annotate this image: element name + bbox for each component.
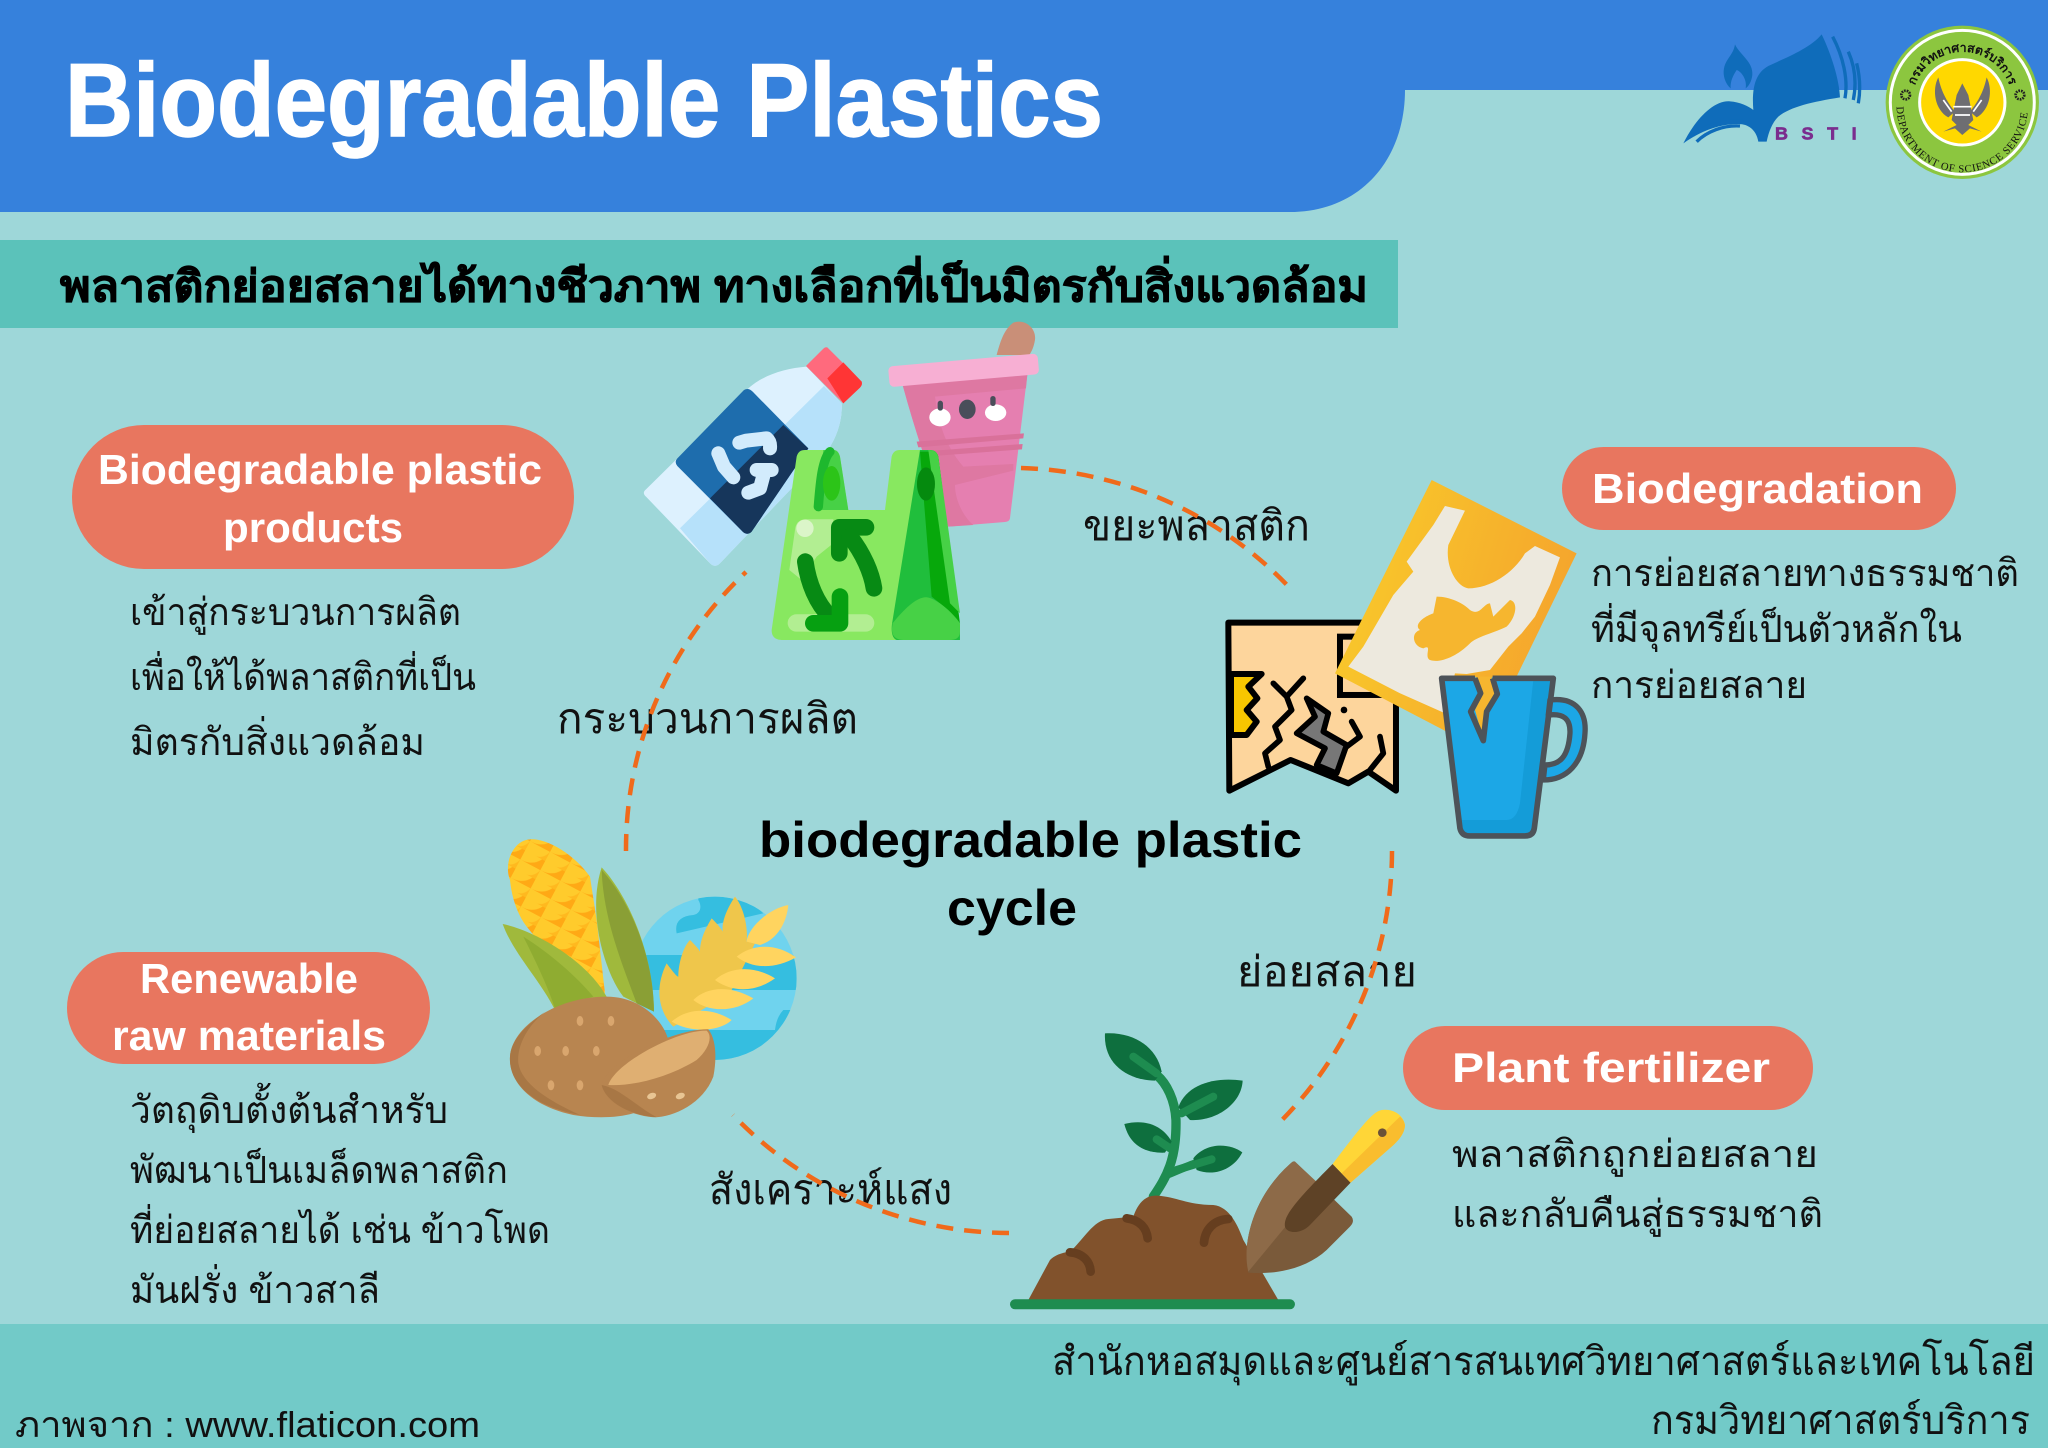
icon: plastic products (bottle, cup, bag) (644, 322, 1039, 640)
pill: Biodegradable plastic products: Biodegradable plastic (98, 446, 542, 493)
logo: Department of Science Service seal: กรมวิทยาศาสตร์บริการ (1909, 44, 2016, 85)
text: raw materials description: วัตถุดิบตั้งต้นสำหรับ (130, 1082, 448, 1133)
pill: Plant fertilizer: Plant fertilizer (1452, 1044, 1770, 1091)
text: products description: มิตรกับสิ่งแวดล้อม (130, 716, 425, 764)
cycle labels: กระบวนการผลิต (557, 695, 858, 742)
text: biodegradation description: การย่อยสลาย (1591, 665, 1807, 707)
footer credit: ภาพจาก : www.flaticon.com (15, 1404, 480, 1445)
icon: biodegradation (torn box, packet, broken mug) (1228, 480, 1585, 836)
logo: Department of Science Service seal (1886, 26, 2039, 179)
text: products description: เข้าสู่กระบวนการผลิต (130, 592, 461, 635)
pill: Renewable raw materials: Renewable (140, 955, 358, 1002)
icon: raw materials (corn, wheat, potato) (503, 839, 797, 1117)
footer organisation: กรมวิทยาศาสตร์บริการ (1651, 1398, 2030, 1443)
footer organisation (1052, 1339, 2035, 1443)
header banner (0, 0, 2048, 212)
text: biodegradation description: การย่อยสลายทางธรรมชาติ (1591, 553, 2019, 595)
logo: BSTI (1683, 34, 1860, 143)
cycle dashed arrows (626, 468, 1392, 1233)
subtitle band (0, 240, 1398, 328)
pill: Plant fertilizer (1403, 1026, 1813, 1110)
cycle labels: ขยะพลาสติก (1083, 502, 1310, 549)
pill: Biodegradable plastic products: products (223, 504, 403, 551)
pill: Biodegradation (1562, 447, 1956, 530)
pill: Biodegradable plastic products (72, 425, 574, 569)
pill: Biodegradation: Biodegradation (1592, 465, 1923, 512)
logo: BSTI: BSTI (1775, 123, 1857, 143)
pill: Renewable raw materials (67, 952, 430, 1064)
text: raw materials description: พัฒนาเป็นเมล็ดพลาสติก (130, 1147, 508, 1192)
cycle labels (557, 502, 1417, 1213)
centre heading: cycle (947, 880, 1077, 936)
centre heading (759, 812, 1302, 936)
text: fertilizer description (1452, 1134, 1823, 1237)
logo: Department of Science Service seal: DEPARTMENT OF SCIENCE SERVICE (1896, 106, 2028, 172)
icon: plant, soil and trowel (1010, 1033, 1405, 1309)
subtitle band: พลาสติกย่อยสลายได้ทางชีวภาพ ทางเลือกที่เป็นมิตรกับสิ่งแวดล้อม (60, 256, 1368, 311)
title: Biodegradable Plastics (65, 43, 1103, 159)
pill: Renewable raw materials: raw materials (112, 1012, 386, 1059)
cycle labels: ย่อยสลาย (1237, 948, 1417, 995)
cycle labels: สังเคราะห์แสง (709, 1166, 952, 1213)
text: fertilizer description: พลาสติกถูกย่อยสลาย (1452, 1134, 1818, 1177)
text: products description: เพื่อให้ได้พลาสติกที่เป็น (130, 651, 476, 699)
text: biodegradation description: ที่มีจุลทรีย์เป็นตัวหลักใน (1591, 603, 1962, 652)
text: biodegradation description (1591, 553, 2019, 707)
text: raw materials description: มันฝรั่ง ข้าวสาลี (130, 1264, 380, 1312)
text: products description (130, 592, 476, 764)
centre heading: biodegradable plastic (759, 812, 1302, 868)
text: fertilizer description: และกลับคืนสู่ธรรมชาติ (1452, 1194, 1823, 1237)
footer band (0, 1324, 2048, 1448)
text: raw materials description (130, 1082, 550, 1312)
text: raw materials description: ที่ย่อยสลายได้ เช่น ข้าวโพด (130, 1204, 550, 1252)
